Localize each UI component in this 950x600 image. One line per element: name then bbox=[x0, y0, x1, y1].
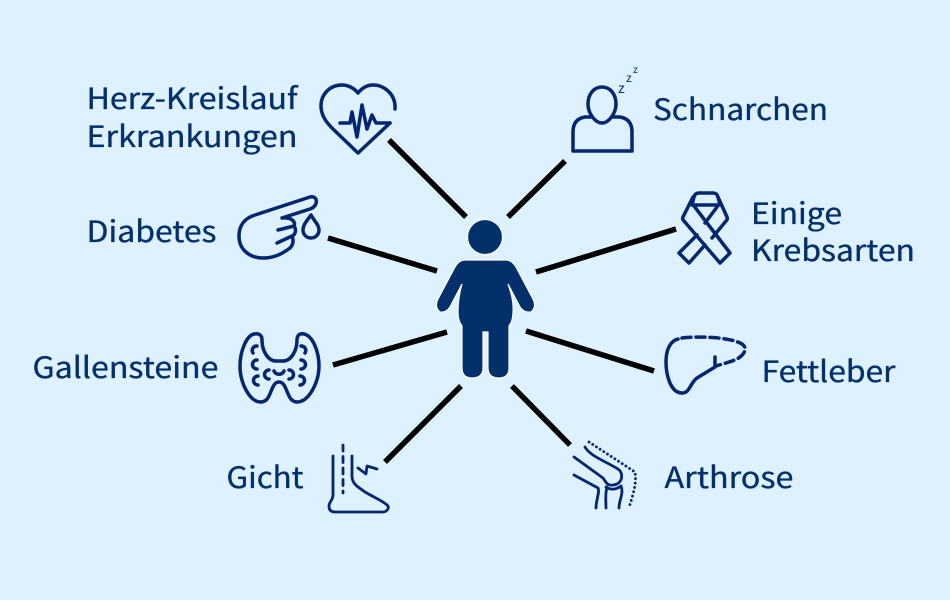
icon: knee joint bbox=[574, 442, 635, 508]
icon: foot with pain bbox=[329, 445, 388, 512]
label: Gicht: Gicht bbox=[226, 455, 304, 497]
label: Herz-Kreislauf Erkrankungen: Herz-Kreislauf bbox=[86, 76, 299, 118]
icon: finger with blood drop bbox=[239, 197, 319, 258]
icon: snoring person bbox=[573, 61, 638, 151]
connector lines bbox=[328, 140, 676, 462]
label: Einige Krebsarten: Krebsarten bbox=[751, 228, 915, 270]
label: Arthrose: Arthrose bbox=[664, 455, 794, 497]
icon: liver bbox=[666, 337, 745, 393]
label: Gallensteine: Gallensteine bbox=[32, 345, 218, 387]
icon: awareness ribbon bbox=[679, 193, 730, 263]
label: Diabetes: Diabetes bbox=[86, 209, 216, 251]
icon: snoring person: z bbox=[618, 78, 625, 98]
label: Herz-Kreislauf Erkrankungen: Erkrankungen bbox=[86, 114, 298, 156]
central figure bbox=[436, 220, 535, 378]
label: Fettleber: Fettleber bbox=[762, 349, 896, 391]
icon: heart with pulse bbox=[321, 85, 395, 153]
icon: snoring person: z bbox=[633, 61, 638, 76]
icon: thyroid bbox=[240, 334, 319, 402]
label: Einige Krebsarten: Einige bbox=[751, 191, 842, 233]
icon: snoring person: z bbox=[626, 69, 632, 86]
label: Schnarchen: Schnarchen bbox=[653, 87, 828, 129]
label: Herz-Kreislauf Erkrankungen bbox=[86, 76, 299, 156]
label: Einige Krebsarten bbox=[751, 191, 915, 270]
